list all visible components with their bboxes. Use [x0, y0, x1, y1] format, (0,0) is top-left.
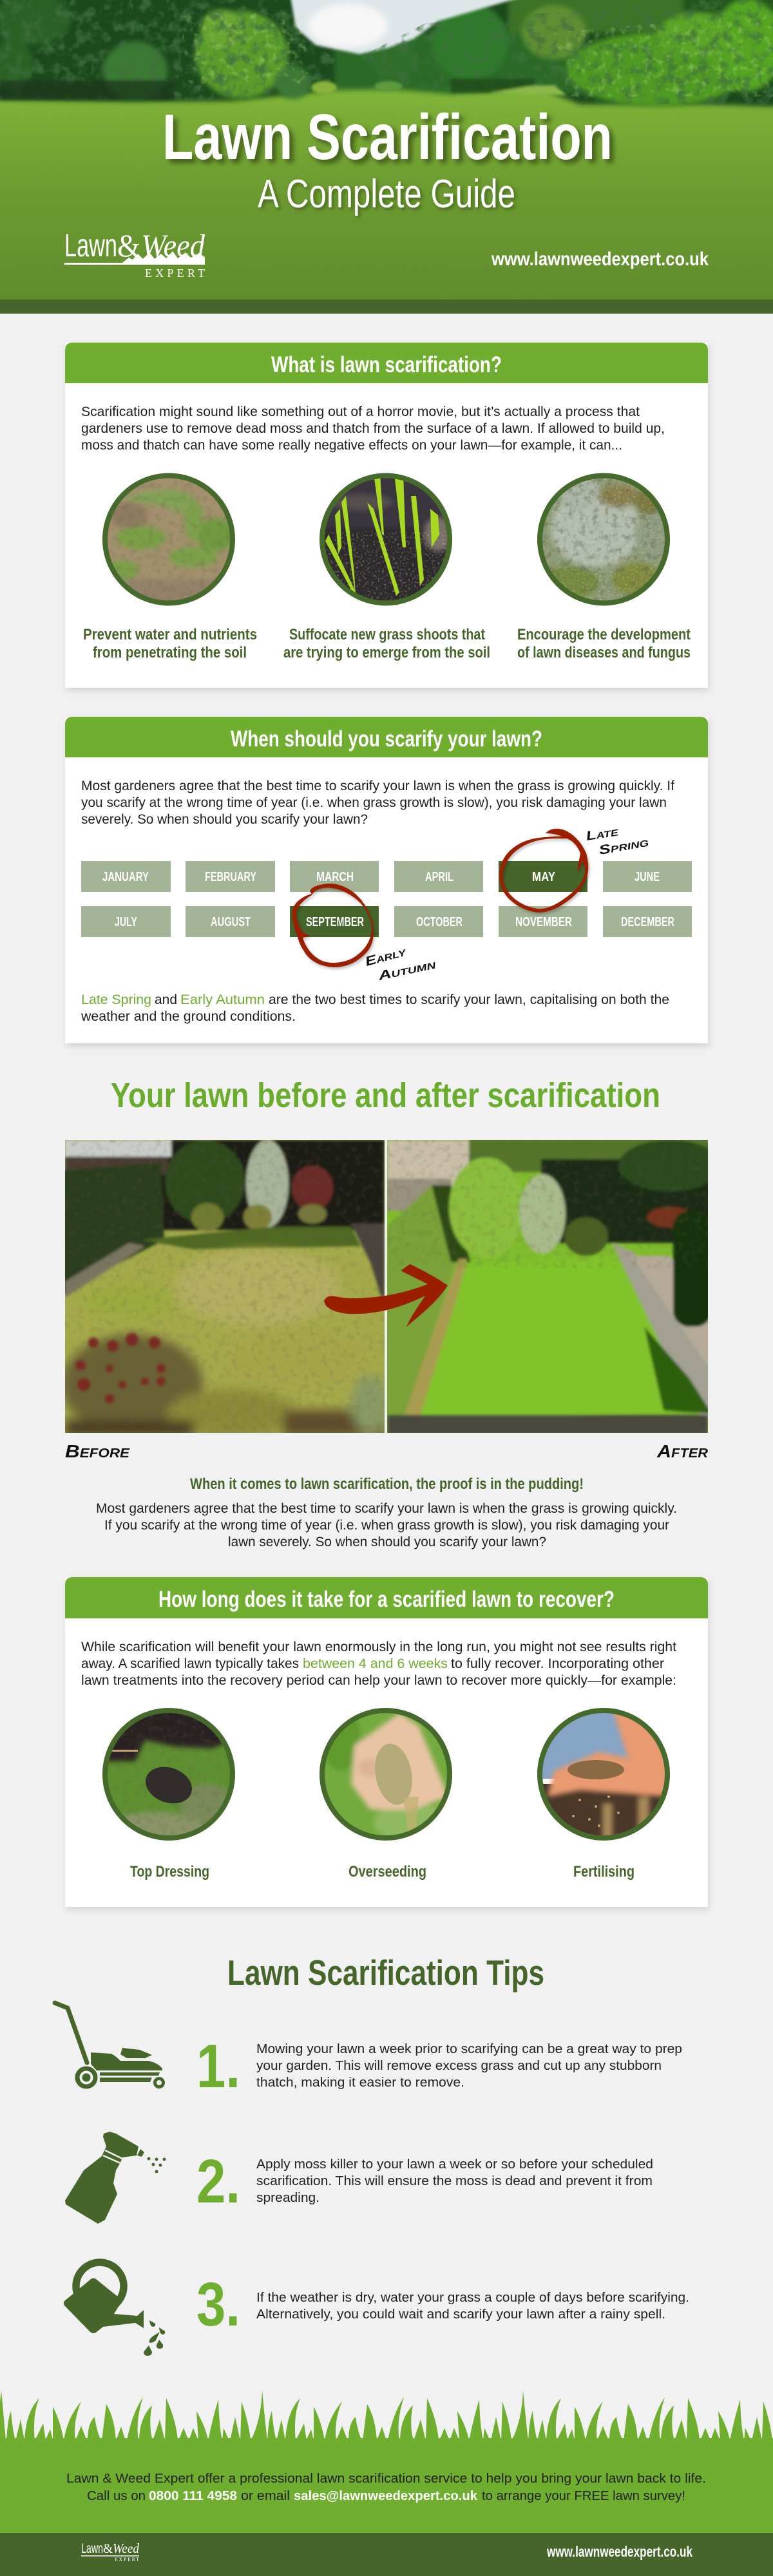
heading: Your lawn before and after scarification — [111, 1076, 660, 1115]
panel: when to scarify — [65, 717, 708, 1043]
month calendar: APRIL — [425, 870, 453, 884]
panel header — [65, 1577, 708, 1618]
call to action text: Call us on — [87, 2489, 146, 2503]
call to action text — [66, 2472, 706, 2503]
tip 1 text: thatch, making it easier to remove. — [256, 2076, 464, 2090]
intro text — [81, 404, 665, 453]
intro text: lawn treatments into the recovery period can help your lawn to recover more quickly—for example: — [81, 1673, 676, 1688]
dark green band — [0, 299, 773, 314]
panel header — [65, 343, 708, 383]
caption: diseases and fungus: of lawn diseases and fungus — [517, 644, 691, 661]
month calendar: JUNE — [635, 870, 660, 884]
tip 1 text — [256, 2042, 682, 2090]
month calendar: JANUARY — [102, 870, 149, 884]
month calendar — [81, 861, 692, 937]
closing text: and — [155, 992, 177, 1007]
tip 3 text: Alternatively, you could wait and scarify your lawn after a rainy spell. — [256, 2307, 665, 2322]
intro text: gardeners use to remove dead moss and thatch from the surface of a lawn. If allowed to build up, — [81, 421, 665, 436]
intro text: away. A scarified lawn typically takes — [81, 1656, 299, 1671]
tip 1 text: Mowing your lawn a week prior to scarifying can be a great way to prep — [256, 2042, 682, 2056]
caption: overseeding: Overseeding — [348, 1863, 426, 1880]
handwritten label: early autumn — [364, 944, 437, 983]
photo: moss and fungus — [535, 473, 669, 605]
photo: after — [383, 1137, 721, 1434]
month calendar: FEBRUARY — [205, 870, 256, 884]
caption: water and nutrients: Prevent water and nutrients — [83, 626, 257, 643]
month calendar: MARCH — [316, 870, 354, 884]
intro text: severely. So when should you scarify your lawn? — [81, 812, 368, 827]
call to action text: to arrange your FREE lawn survey! — [482, 2489, 685, 2503]
intro text: While scarification will benefit your lawn enormously in the long run, you might not see results right — [81, 1640, 676, 1654]
grass silhouette — [0, 2391, 773, 2533]
label: before: Before — [65, 1441, 130, 1461]
photo: fertilising — [538, 1708, 670, 1842]
closing text — [81, 992, 669, 1024]
number 1: 1. — [196, 2032, 240, 2101]
divider gap between photos — [385, 1140, 387, 1433]
logo: Weed — [141, 227, 205, 263]
photo: patchy dead lawn — [103, 473, 235, 605]
intro text: between 4 and 6 weeks — [303, 1656, 448, 1671]
footer logo: Lawn — [81, 2541, 103, 2556]
intro text — [81, 1640, 676, 1688]
heading: Lawn Scarification Tips — [227, 1953, 544, 1993]
text block: If you scarify at the wrong time of year (i.e. when grass growth is slow), you risk damaging your — [104, 1518, 669, 1533]
photo: overseeding — [320, 1707, 452, 1842]
header banner — [0, 0, 773, 314]
icon: watering can — [64, 2262, 165, 2356]
footer logo: EXPERT — [115, 2557, 139, 2562]
call to action text: Lawn & Weed Expert offer a professional lawn scarification service to help you bring your lawn back to life. — [66, 2472, 706, 2486]
intro text — [81, 779, 674, 827]
logo: Lawn — [64, 227, 117, 263]
closing text: Late Spring — [81, 992, 151, 1007]
handwritten label: late spring — [585, 824, 650, 858]
caption: water and nutrients — [83, 626, 257, 661]
month calendar: SEPTEMBER — [306, 915, 364, 929]
heading: What is lawn scarification? — [271, 352, 502, 377]
tip 2 text: Apply moss killer to your lawn a week or so before your scheduled — [256, 2157, 653, 2172]
footer: grass and call to action — [0, 2391, 773, 2576]
month calendar: MAY — [532, 870, 556, 884]
call to action text: or email — [241, 2489, 290, 2503]
photo: before — [61, 1140, 390, 1438]
handwritten label: early autumn: Autumn — [376, 957, 437, 983]
arrow: before to after — [324, 1264, 448, 1327]
intro text: Scarification might sound like something out of a horror movie, but it’s actually a process that — [81, 404, 640, 419]
caption: diseases and fungus: Encourage the development — [517, 626, 691, 643]
text block: Most gardeners agree that the best time to scarify your lawn is when the grass is growing quickly. — [96, 1501, 677, 1516]
caption: suffocate shoots: Suffocate new grass shoots that — [289, 626, 485, 643]
photo: top dressing — [103, 1708, 234, 1846]
text block: lawn severely. So when should you scarify your lawn? — [228, 1535, 546, 1549]
title: Lawn Scarification — [162, 101, 613, 173]
tip 3 text: If the weather is dry, water your grass a couple of days before scarifying. — [256, 2291, 689, 2305]
handwritten label: late spring: Spring — [598, 835, 650, 858]
handwritten label: early autumn: Early — [364, 944, 408, 969]
month calendar: DECEMBER — [621, 915, 674, 929]
tip 3 text — [256, 2291, 689, 2322]
month calendar: AUGUST — [211, 915, 251, 929]
caption: suffocate shoots — [283, 626, 490, 661]
icon: spray bottle — [65, 2132, 166, 2224]
section: before and after — [61, 1076, 721, 1549]
hero photo: park lawn and trees — [0, 0, 773, 299]
footer url: www.lawnweedexpert.co.uk — [546, 2543, 692, 2560]
caption: water and nutrients: from penetrating the soil — [93, 644, 247, 661]
month calendar: NOVEMBER — [515, 915, 572, 929]
panel: what is lawn scarification — [65, 343, 708, 688]
panel: recovery time — [65, 1577, 708, 1907]
intro text: moss and thatch can have some really negative effects on your lawn—for example, it can... — [81, 438, 622, 453]
website url: www.lawnweedexpert.co.uk — [491, 249, 709, 270]
footer bar — [0, 2533, 773, 2576]
intro text: Most gardeners agree that the best time to scarify your lawn is when the grass is growing quickly. If — [81, 779, 674, 793]
month calendar: JULY — [115, 915, 137, 929]
footer logo: & — [103, 2541, 113, 2556]
month calendar: OCTOBER — [416, 915, 463, 929]
tip 2 text: spreading. — [256, 2191, 320, 2205]
closing text: Early Autumn — [180, 992, 265, 1007]
subheading: When it comes to lawn scarification, the proof is in the pudding! — [190, 1475, 584, 1493]
panel header — [65, 717, 708, 757]
intro text: you scarify at the wrong time of year (i.e. when grass growth is slow), you risk damaging your lawn — [81, 795, 667, 810]
tip 1 text: your garden. This will remove excess grass and cut up any stubborn — [256, 2059, 662, 2073]
red circle around September — [292, 884, 374, 967]
footer logo — [81, 2541, 139, 2562]
red circle around May — [499, 829, 588, 913]
icon: lawn mower — [55, 2003, 164, 2087]
logo: & — [117, 227, 140, 263]
logo: EXPERT — [145, 267, 205, 279]
caption: top dressing: Top Dressing — [130, 1863, 209, 1880]
number 3: 3. — [196, 2270, 240, 2339]
footer logo: Weed — [113, 2541, 139, 2556]
number 2: 2. — [196, 2147, 240, 2216]
logo — [64, 227, 205, 279]
text block — [96, 1501, 677, 1549]
intro text: to fully recover. Incorporating other — [451, 1656, 664, 1671]
caption: fertilising: Fertilising — [573, 1863, 635, 1880]
tip 2 text — [256, 2157, 653, 2205]
closing text: are the two best times to scarify your lawn, capitalising on both the — [269, 992, 669, 1007]
section: tips — [55, 1953, 689, 2356]
handwritten label: late spring: Late — [585, 824, 620, 844]
tip 2 text: scarification. This will ensure the moss is dead and prevent it from — [256, 2174, 653, 2188]
caption: diseases and fungus — [517, 626, 691, 661]
call to action text: 0800 111 4958 — [149, 2489, 237, 2503]
subtitle: A Complete Guide — [258, 172, 515, 216]
label: after: After — [656, 1441, 709, 1461]
call to action text: sales@lawnweedexpert.co.uk — [294, 2489, 478, 2503]
closing text: weather and the ground conditions. — [81, 1009, 296, 1024]
heading: When should you scarify your lawn? — [231, 726, 542, 752]
caption: suffocate shoots: are trying to emerge from the soil — [283, 644, 490, 661]
heading: How long does it take for a scarified lawn to recover? — [158, 1587, 615, 1612]
photo: grass shoots in soil — [320, 473, 452, 605]
